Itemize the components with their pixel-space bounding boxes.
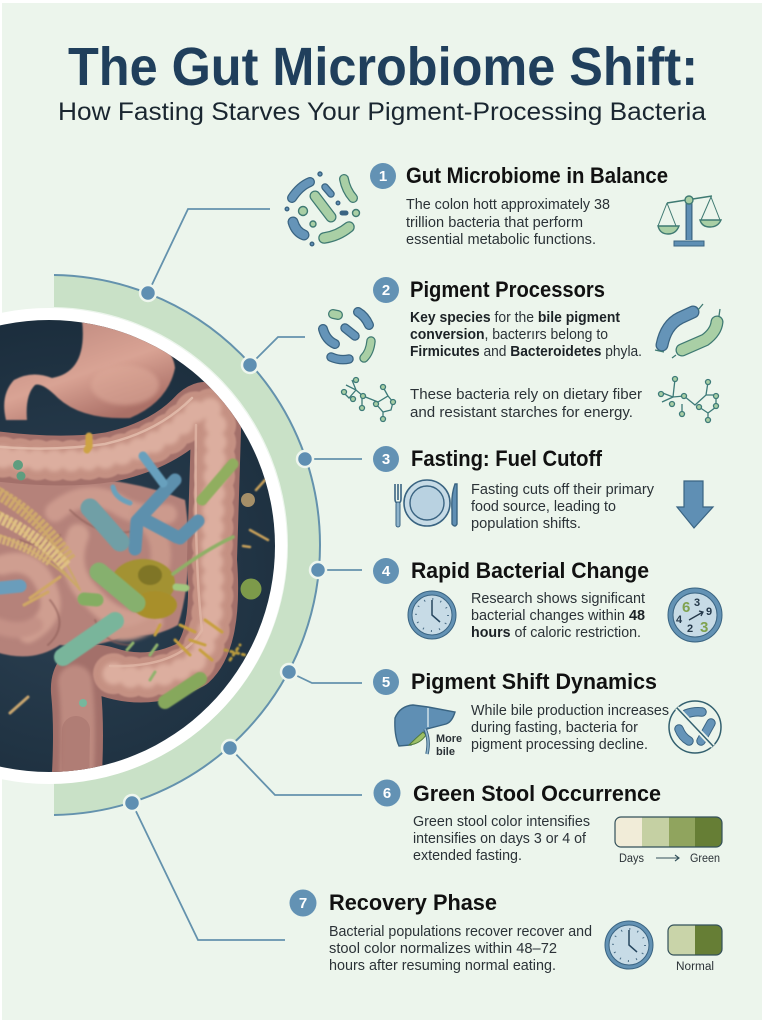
- icon: numbered dial: 2: [687, 623, 693, 635]
- icon: liver: bile: [436, 746, 455, 758]
- badge 3: [373, 446, 399, 472]
- wheat: [0, 488, 80, 605]
- text 7: stool color normalizes within 48–72: [329, 941, 557, 957]
- text 2a: Key species for the bile pigment: [410, 310, 620, 326]
- color scale: normal: Normal: [676, 961, 714, 973]
- badge 6: 6: [383, 785, 391, 802]
- bacteria in image: [0, 436, 268, 713]
- badge 2: [373, 277, 399, 303]
- badge 3: 3: [382, 451, 390, 468]
- section 4: rapid bacterial change: [373, 558, 722, 642]
- badge 5: [373, 669, 399, 695]
- text 3: [471, 482, 655, 532]
- icon: numbered dial: 6: [682, 599, 690, 616]
- heading 1: Gut Microbiome in Balance: [406, 163, 668, 188]
- text 6: [413, 814, 590, 864]
- timeline dots: [124, 285, 326, 811]
- icon: numbered dial: [668, 588, 722, 642]
- small intestine mass: [0, 478, 189, 656]
- badge 1: 1: [379, 168, 387, 185]
- color scale: days to green: Days: [619, 853, 644, 865]
- icon: crossed-out bacteria: [669, 701, 721, 753]
- text 2b: and resistant starches for energy.: [410, 405, 633, 421]
- badge 1: [370, 163, 396, 189]
- icon: liver: [395, 705, 462, 758]
- icon: balance scale: [658, 196, 721, 246]
- text 1: [406, 197, 610, 248]
- title: The Gut Microbiome Shift:: [68, 37, 698, 97]
- text 4: [471, 591, 645, 641]
- text 3: food source, leading to: [471, 499, 616, 515]
- text 3: population shifts.: [471, 516, 581, 532]
- badge 4: [373, 558, 399, 584]
- green arc band: [54, 274, 321, 816]
- text 1: The colon hott approximately 38: [406, 197, 610, 213]
- section 1: gut microbiome in balance: [285, 163, 721, 248]
- icon: chained bacteria: [655, 304, 720, 358]
- text 4: bacterial changes within 48: [471, 608, 645, 624]
- badge 6: [374, 780, 400, 806]
- text 4: hours of caloric restriction.: [471, 625, 641, 641]
- text 2a: Firmicutes and Bacteroidetes phyla.: [410, 344, 642, 360]
- icon: molecule left: [342, 378, 396, 422]
- badge 7: 7: [299, 895, 307, 912]
- color scale: days to green: [615, 817, 722, 865]
- text 2a: [410, 310, 642, 360]
- text 6: intensifies on days 3 or 4 of: [413, 831, 587, 847]
- icon: numbered dial: 9: [706, 606, 712, 618]
- connector lines: [132, 209, 362, 940]
- text 4: Research shows significant: [471, 591, 645, 607]
- text 2a: conversion, bacterırs belong to: [410, 327, 608, 343]
- heading 3: Fasting: Fuel Cutoff: [411, 446, 603, 471]
- heading 6: Green Stool Occurrence: [413, 781, 661, 806]
- text 5: pigment processing decline.: [471, 737, 648, 753]
- badge 4: 4: [382, 563, 391, 580]
- heading 2: Pigment Processors: [410, 277, 605, 302]
- icon: down arrow: [677, 481, 713, 528]
- color scale: normal: [668, 925, 722, 973]
- icon: rod bacteria group: [323, 312, 371, 360]
- section 7: recovery phase: [290, 890, 722, 974]
- color scale: days to green: Green: [690, 853, 720, 865]
- yellow pigment pile: [111, 559, 177, 619]
- colon: [0, 398, 216, 790]
- text 6: Green stool color intensifies: [413, 814, 590, 830]
- heading 5: Pigment Shift Dynamics: [411, 669, 657, 694]
- section 5: pigment shift dynamics: [373, 669, 721, 758]
- icon: plate and cutlery: [395, 480, 457, 526]
- icon: molecule right: [658, 376, 718, 422]
- icon: numbered dial: 3: [694, 597, 700, 609]
- heading 4: Rapid Bacterial Change: [411, 558, 649, 583]
- text 2b: [410, 387, 642, 421]
- subtitle: How Fasting Starves Your Pigment-Processing Bacteria: [58, 98, 706, 126]
- text 7: [329, 924, 592, 974]
- stomach: [4, 320, 175, 420]
- text 7: hours after resuming normal eating.: [329, 958, 556, 974]
- badge 7: [290, 890, 316, 916]
- text 2b: These bacteria rely on dietary fiber: [410, 387, 642, 403]
- icon: numbered dial: 3: [700, 619, 708, 636]
- icon: bacteria cluster: [285, 172, 360, 246]
- heading 7: Recovery Phase: [329, 890, 497, 915]
- text 6: extended fasting.: [413, 848, 522, 864]
- section 3: fasting fuel cutoff: [373, 446, 713, 532]
- text 1: essential metabolic functions.: [406, 232, 596, 248]
- text 5: during fasting, bacteria for: [471, 720, 638, 736]
- icon: liver: More: [436, 733, 462, 745]
- text 5: While bile production increases: [471, 703, 669, 719]
- text 1: trillion bacteria that perform: [406, 215, 583, 231]
- badge 2: 2: [382, 282, 390, 299]
- badge 5: 5: [382, 674, 390, 691]
- icon: recovery clock: [605, 921, 653, 969]
- text 5: [471, 703, 669, 753]
- text 3: Fasting cuts off their primary: [471, 482, 655, 498]
- icon: clock: [408, 591, 456, 639]
- text 7: Bacterial populations recover recover and: [329, 924, 592, 940]
- icon: numbered dial: 4: [676, 614, 683, 626]
- gut illustration circle: [0, 308, 287, 790]
- section 2: pigment processors: [323, 277, 720, 422]
- section 6: green stool occurrence: [374, 780, 722, 865]
